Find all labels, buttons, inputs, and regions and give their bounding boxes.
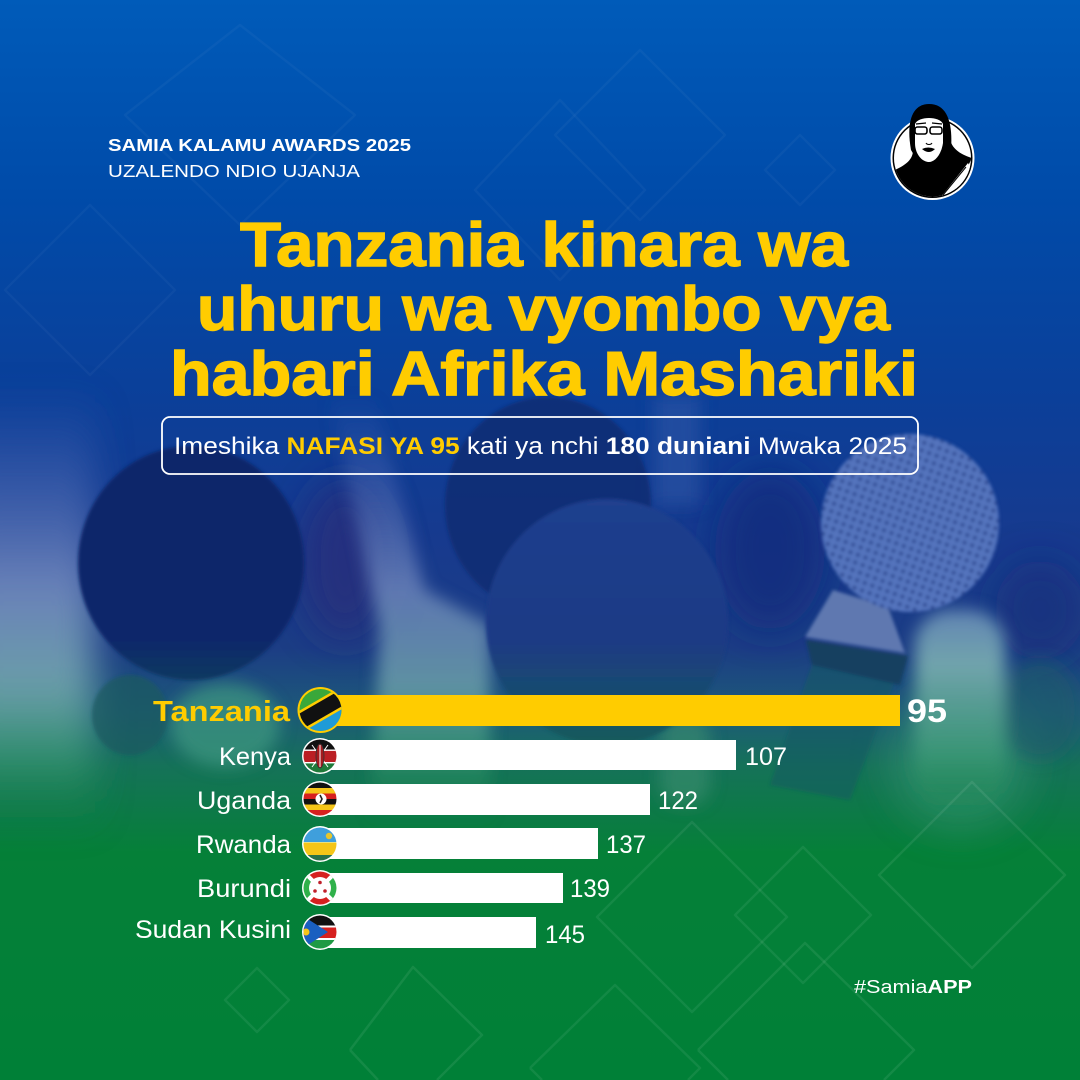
row: Tanzania: Tanzania [153, 696, 291, 728]
row: Rwanda: 137 [606, 831, 646, 859]
hashtag: #Samia APP [854, 977, 972, 997]
row: Burundi [199, 870, 609, 906]
middle mic [486, 499, 728, 745]
header: programme name [108, 135, 411, 181]
header: programme name: UZALENDO NDIO UJANJA [108, 161, 360, 181]
row: Burundi: 139 [570, 875, 610, 903]
row: Uganda: Uganda [197, 787, 291, 815]
title: habari Afrika Mashariki [170, 340, 918, 409]
title: uhuru wa vyombo vya [197, 275, 891, 344]
row: Kenya [219, 738, 787, 775]
row: Uganda [197, 781, 698, 818]
row: Burundi: Burundi [197, 875, 291, 903]
title: Tanzania kinara wa [240, 211, 849, 280]
header: programme name: SAMIA KALAMU AWARDS 2025 [108, 135, 411, 155]
logo: portrait illustration in a circle [890, 104, 975, 200]
row: Rwanda [196, 826, 646, 863]
right mic stem [770, 665, 895, 800]
row: Tanzania: 95 [907, 693, 947, 729]
bar chart: press freedom rank [135, 686, 947, 951]
row: Kenya: 107 [745, 743, 787, 771]
right mic handle [805, 590, 905, 653]
row: Kenya: Kenya [219, 743, 291, 771]
right mic head [821, 434, 999, 612]
row: Uganda: 122 [658, 787, 698, 815]
row: Sudan Kusini: 145 [545, 921, 585, 949]
row: Rwanda: Rwanda [196, 831, 291, 859]
row: Sudan Kusini [135, 914, 585, 951]
subtitle callout box [162, 417, 918, 474]
subtitle callout box: Imeshika NAFASI YA 95 kati ya nchi 180 duniani Mwaka 2025 [174, 433, 907, 460]
row: Tanzania [153, 686, 947, 734]
back centre mic [445, 397, 651, 613]
row: Sudan Kusini: Sudan Kusini [135, 916, 291, 944]
left mic [92, 675, 168, 755]
title [170, 211, 918, 409]
